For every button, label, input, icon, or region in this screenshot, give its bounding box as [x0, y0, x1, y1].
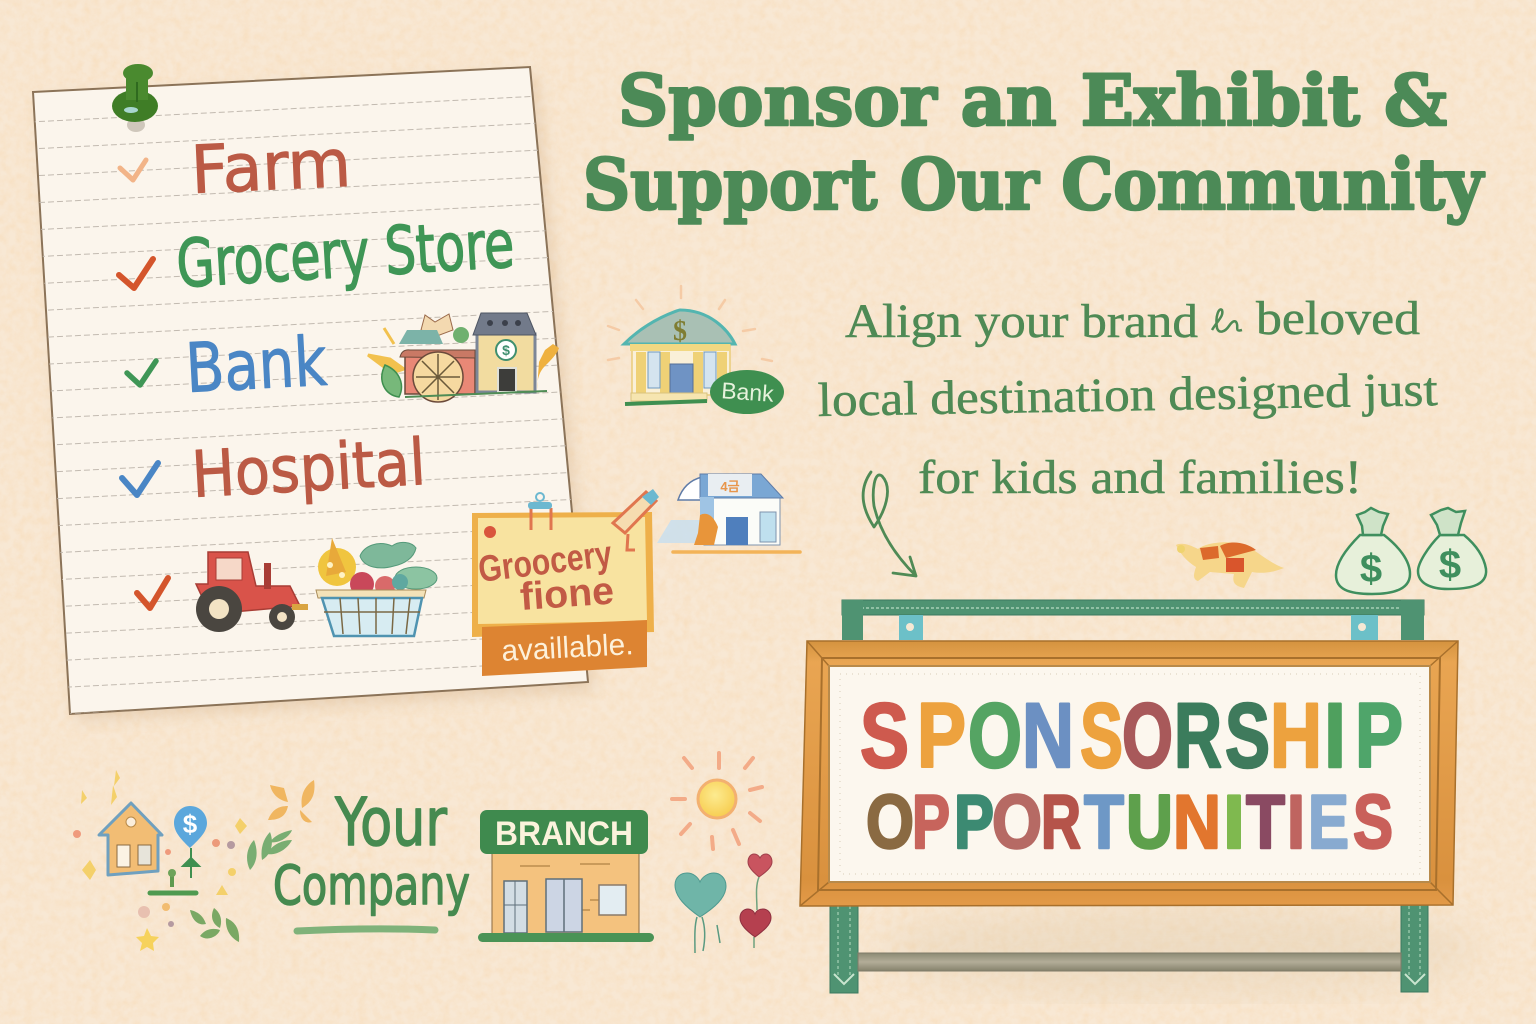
sign heading: OPPORTUNITIES: T [1084, 780, 1124, 865]
title line 1: Sponsor an Exhibit & [618, 59, 1447, 142]
sign heading: OPPORTUNITIES: R [1041, 780, 1081, 865]
icon: green sprig [247, 830, 292, 870]
bank label: Bank [720, 377, 775, 407]
icon: branch shop [478, 810, 654, 942]
icon: bank building: $ [673, 316, 687, 347]
icon: paper clip [528, 493, 552, 530]
panel: grocery note card [472, 489, 659, 676]
icon: bank building [608, 286, 784, 414]
sign heading: OPPORTUNITIES: I [1223, 780, 1245, 865]
body line 1 [845, 292, 1420, 348]
list item: Grocery Store [119, 205, 516, 303]
icon: marker [613, 489, 659, 550]
sign heading: OPPORTUNITIES: S [1353, 780, 1393, 865]
sign heading: SPONSORSHIP: P [917, 685, 966, 787]
icon: heart balloons [675, 854, 772, 953]
sign heading: SPONSORSHIP: S [1080, 685, 1123, 787]
sign heading: SPONSORSHIP: S [1225, 685, 1270, 787]
icon: storefront cluster: $ [502, 342, 510, 358]
title line 2: Support Our Community [583, 143, 1485, 226]
sign heading: SPONSORSHIP: O [1122, 685, 1173, 787]
list item: Hospital: Hospital [190, 426, 428, 513]
underline: company [297, 929, 435, 931]
icon: small shop [657, 474, 800, 552]
icon: green push pin [112, 64, 158, 132]
body line 1: beloved [1256, 292, 1420, 345]
sign heading: SPONSORSHIP: S [860, 685, 909, 787]
note text: available: availlable. [501, 628, 634, 668]
list item: Farm [120, 125, 353, 209]
panel: sponsorship sign [800, 600, 1480, 995]
sign heading: OPPORTUNITIES: P [912, 780, 950, 865]
body line 1: Align your brand [845, 295, 1198, 348]
title [583, 59, 1485, 226]
icon: money bags: $ [1360, 547, 1382, 591]
sign heading: SPONSORSHIP: H [1270, 685, 1322, 787]
note text: Groocery: Groocery [476, 533, 614, 590]
sign heading: OPPORTUNITIES: N [1173, 780, 1221, 865]
sign heading: OPPORTUNITIES: U [1126, 780, 1173, 865]
sign heading: OPPORTUNITIES: O [992, 780, 1042, 865]
list item: Farm: Farm [189, 125, 353, 209]
icon: turtle [1176, 542, 1284, 588]
check mark: fifth item [137, 578, 168, 608]
body text [817, 292, 1439, 504]
sign heading: OPPORTUNITIES [866, 780, 1393, 865]
sign heading: OPPORTUNITIES: E [1308, 780, 1349, 865]
sign heading: SPONSORSHIP: O [968, 685, 1022, 787]
icon: red tractor [196, 552, 308, 632]
list item: Bank: Bank [184, 323, 329, 409]
sign heading: SPONSORSHIP: I [1324, 685, 1346, 787]
branch label: BRANCH [495, 815, 633, 853]
body line 2: local destination designed just [817, 363, 1439, 427]
sign heading: OPPORTUNITIES: O [866, 780, 914, 865]
icon: sun [672, 753, 762, 849]
body line 3: for kids and families! [918, 451, 1362, 504]
sign stand [830, 600, 1428, 993]
icon group: house and location pin [73, 770, 247, 951]
sign heading: SPONSORSHIP: N [1022, 685, 1074, 787]
icon: autumn leaves [268, 780, 314, 822]
sign heading: OPPORTUNITIES: I [1287, 780, 1305, 865]
wooden frame [800, 641, 1458, 906]
arrow: curly pointer to sign [863, 472, 916, 576]
sign heading: OPPORTUNITIES: P [954, 780, 994, 865]
sign heading: SPONSORSHIP: R [1174, 685, 1222, 787]
icon: storefront cluster [368, 313, 559, 402]
orange band [482, 620, 647, 676]
icon: small shop: 4금 [720, 479, 740, 494]
panel: pinned checklist note [30, 64, 600, 720]
note text: fione: fione [519, 570, 615, 619]
company text: Company: Company [273, 854, 470, 917]
sign heading: SPONSORSHIP [860, 685, 1403, 787]
icon: money bags [1336, 508, 1486, 594]
list item: Grocery Store: Grocery Store [174, 205, 516, 303]
icon: money bags: $ [1439, 543, 1461, 587]
icon: grocery basket [316, 538, 437, 636]
company label [273, 784, 470, 917]
company text: Your: Your [334, 784, 448, 861]
sign heading: SPONSORSHIP: P [1355, 685, 1403, 787]
icon group: house and location pin: $ [183, 809, 198, 839]
sign heading: OPPORTUNITIES: T [1246, 780, 1285, 865]
list item: Bank [127, 323, 329, 409]
